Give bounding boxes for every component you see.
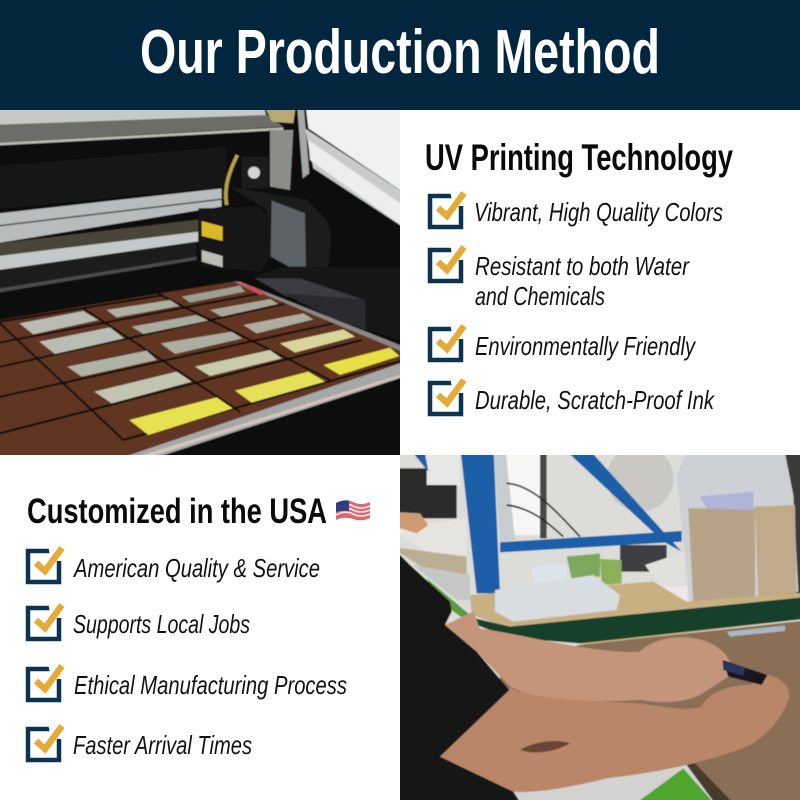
item: vibrant colors: Vibrant, High Quality Colors xyxy=(474,197,723,227)
item: vibrant colors xyxy=(430,190,723,227)
item: resistant: Resistant to both Water xyxy=(475,251,690,281)
icon: American flag xyxy=(336,500,370,520)
item: faster arrival: Faster Arrival Times xyxy=(73,730,252,760)
item: durable ink: Durable, Scratch-Proof Ink xyxy=(475,385,716,415)
printing bed grid xyxy=(0,282,410,465)
item: local jobs xyxy=(28,602,250,639)
raised white printer lid xyxy=(305,100,410,232)
elbow shadow xyxy=(520,741,570,752)
item: resistant: and Chemicals xyxy=(475,281,605,311)
item: environmentally friendly xyxy=(430,323,697,361)
clear plastic bags with cardboard xyxy=(677,445,798,603)
item: American quality xyxy=(28,545,320,583)
photo: UV printer bed with printed name badges xyxy=(0,110,400,455)
heading: Customized in the USA: Customized in the USA xyxy=(27,492,327,531)
item: American quality: American Quality & Service xyxy=(72,553,320,583)
brown workbench xyxy=(500,620,800,800)
item: resistant xyxy=(430,244,690,311)
item: ethical manufacturing xyxy=(28,663,347,700)
item: faster arrival xyxy=(28,723,252,760)
badge held in hands xyxy=(723,660,767,685)
supply boxes on shelf xyxy=(390,512,687,623)
blue shelving rack xyxy=(407,445,682,593)
panel: customized in the USA xyxy=(27,492,370,760)
green bin on bench xyxy=(470,575,800,645)
panel: UV printing technology xyxy=(425,137,733,415)
print head carriage xyxy=(198,100,333,277)
item: durable ink xyxy=(430,377,716,415)
far forearm and hand xyxy=(445,612,730,702)
near forearm and hand xyxy=(440,675,789,792)
photo: worker inspecting a badge at workbench xyxy=(400,455,800,800)
item: ethical manufacturing: Ethical Manufacturing Process xyxy=(74,670,347,700)
header band xyxy=(0,0,800,110)
printed badges on bed xyxy=(19,286,399,435)
black t-shirt xyxy=(390,545,525,800)
item: local jobs: Supports Local Jobs xyxy=(73,609,250,639)
item: environmentally friendly: Environmentally Friendly xyxy=(475,331,697,361)
